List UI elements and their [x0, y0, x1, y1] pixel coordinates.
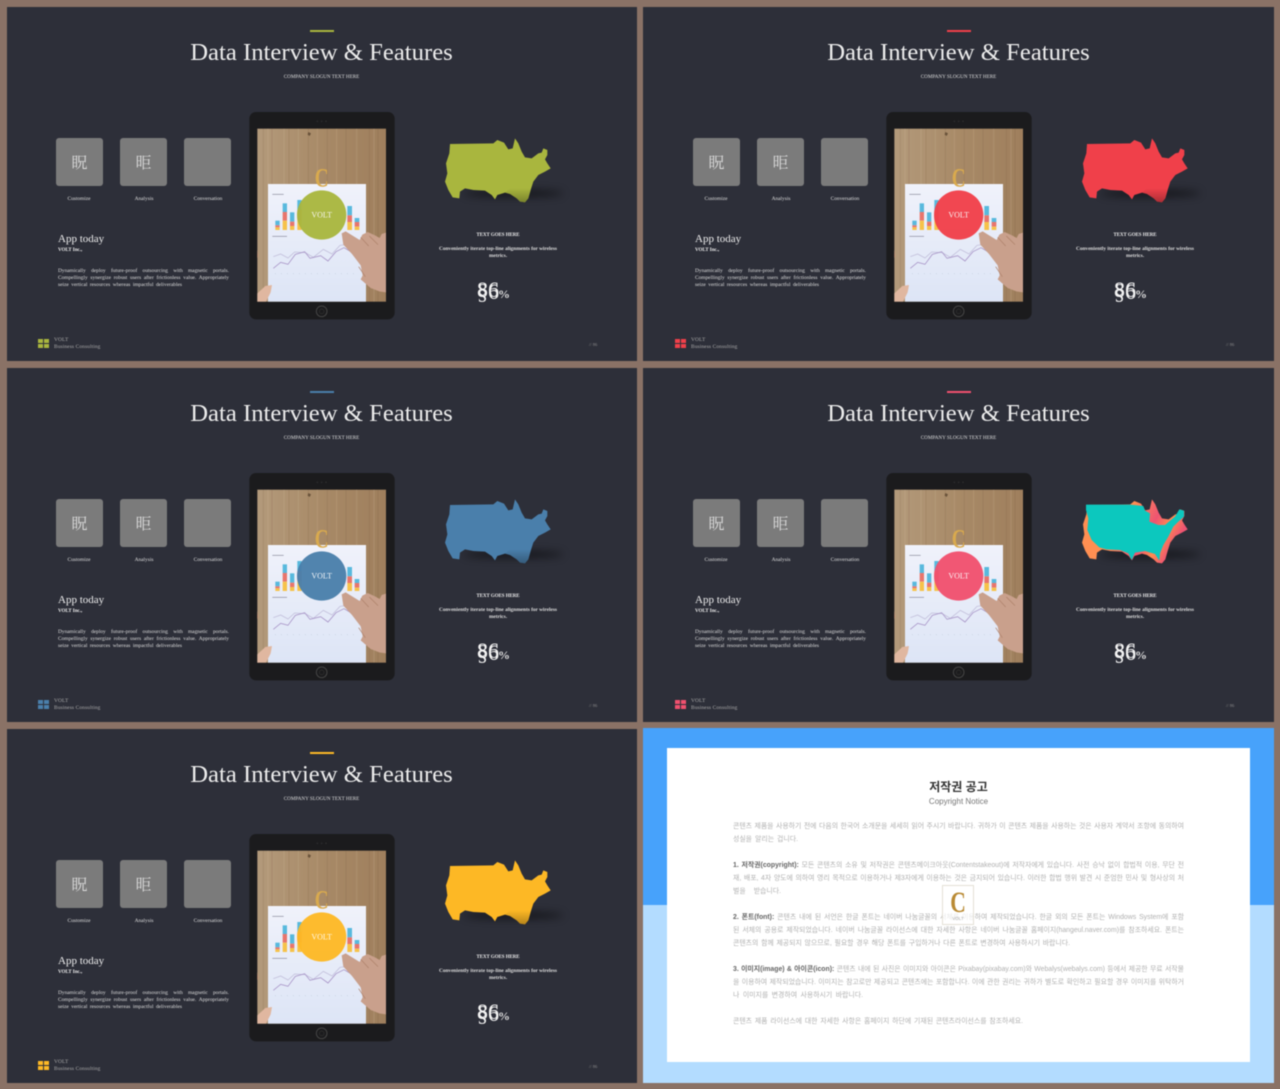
subheading: VOLT Inc.,: [695, 609, 719, 614]
icon: customize tile: [693, 499, 740, 547]
label: customize: Customize: [67, 918, 91, 924]
footer text: VOLT: [54, 1059, 68, 1065]
slogan: COMPANY SLOGUN TEXT HERE: [921, 435, 996, 441]
statistic: 86%: %: [1135, 287, 1147, 301]
footer text: VOLT: [691, 698, 705, 704]
title: Data Interview & Features: [190, 761, 453, 788]
label: customize: Customize: [67, 196, 91, 202]
map caption: metrics.: [489, 975, 507, 981]
map caption: [438, 246, 558, 259]
accent line: [310, 30, 334, 32]
map caption: metrics.: [1126, 253, 1144, 259]
icon: customize tile: 眖: [708, 511, 724, 534]
map caption: [1076, 246, 1194, 259]
text block: Dynamically deploy future-proof outsourcing with magnetic portals.: [58, 629, 229, 635]
footer logo: [674, 699, 687, 710]
page number: // 86: [1226, 342, 1234, 347]
section 1 line 2: 재, 배포, 4자 양도에 의하여 영리 목적으로 이용하거나 제3자에게 이용하는 것은 금지되어 있습니다. 이러한 합법 행위 발견 시 준엄한 민사 및 형사상의 처: [733, 875, 1184, 882]
accent line: [947, 30, 971, 32]
heading: app today: App today: [58, 594, 104, 606]
icon: customize tile: [56, 499, 103, 547]
map: usa: [1081, 138, 1196, 203]
map caption heading: TEXT GOES HERE: [476, 955, 520, 960]
icon: conversation tile: [821, 499, 868, 547]
statistic: 86%: [477, 277, 510, 304]
map caption: [438, 606, 558, 620]
tablet with photo and circle: [886, 112, 1032, 320]
page number: // 86: [589, 342, 597, 347]
section 2: font: 2. 폰트(font): 콘텐츠 내에 된 서언은 한글 폰트는 네이버 나눔글꼴의 서체를 이용하여 제작되었습니다. 한글 외의 모든 폰트는 Windows System에 포함: [733, 914, 1184, 921]
statistic: 86%: %: [1135, 648, 1147, 662]
label: conversation: Conversation: [831, 557, 859, 563]
statistic: 86%: §6: [477, 279, 499, 304]
logo badge: C: [950, 886, 966, 919]
map caption: metrics.: [489, 614, 507, 620]
accent line: [310, 391, 334, 393]
footer text: VOLT: [691, 337, 705, 343]
label: conversation: Conversation: [194, 196, 222, 202]
text block: [58, 990, 230, 1010]
title: Data Interview & Features: [190, 400, 453, 427]
icon: conversation tile: [184, 499, 231, 547]
logo badge: [942, 884, 974, 926]
statistic: 86%: 86: [477, 277, 499, 302]
section 2 line 2: 된 서체의 공용로 제작되었습니다. 네이버 나눔글꼴 라이선스에 대한 자세한 사항은 네이버 나눔글꼴 홈페이지(hangeul.naver.com)를 참조하세요. 폰트는: [733, 927, 1184, 934]
text block: [694, 268, 866, 288]
panel: slide 5 (yellow): [7, 729, 637, 1083]
logo badge: VOLT: [952, 916, 964, 921]
icon: conversation tile: [184, 860, 231, 908]
tablet with photo and circle: C: [315, 525, 329, 555]
map caption: metrics.: [1126, 614, 1144, 620]
tablet with photo and circle: VOLT: [948, 211, 969, 220]
text block: seize vertical resources whereas impactful deliverables: [58, 1004, 182, 1010]
label: customize: Customize: [704, 196, 728, 202]
icon: conversation tile: [821, 138, 868, 186]
statistic: 86%: §6: [477, 640, 499, 665]
icon: customize tile: 眖: [708, 150, 724, 173]
map caption: Conveniently iterate top-line alignments for wireless: [1076, 607, 1194, 613]
text block: seize vertical resources whereas impactful deliverables: [58, 282, 182, 288]
map caption: Conveniently iterate top-line alignments for wireless: [1076, 246, 1194, 252]
label: analysis: Analysis: [772, 196, 790, 202]
footer text: [54, 337, 101, 350]
text block: seize vertical resources whereas impactful deliverables: [58, 643, 182, 649]
section 2 line 3: 콘텐츠의 함께 제공되지 않으므로, 필요할 경우 해당 폰트를 구입하거나 다른 폰트로 변경하여 사용하시기 바랍니다.: [733, 940, 1070, 947]
heading: app today: App today: [58, 233, 104, 245]
statistic: 86%: §6: [477, 1001, 499, 1026]
label: analysis: Analysis: [135, 557, 153, 563]
footer text: [54, 1059, 101, 1072]
subheading: VOLT Inc.,: [58, 248, 82, 253]
subheading: VOLT Inc.,: [58, 970, 82, 975]
statistic: 86%: [1114, 277, 1147, 304]
statistic: 86%: 86: [1114, 277, 1136, 302]
icon: analysis tile: [120, 860, 167, 908]
panel: slide 3 (blue): [7, 368, 637, 722]
footer text: VOLT: [54, 698, 68, 704]
slogan: COMPANY SLOGUN TEXT HERE: [921, 74, 996, 80]
icon: analysis tile: [757, 138, 804, 186]
text block: [58, 268, 230, 288]
label: conversation: Conversation: [194, 557, 222, 563]
map: usa: [444, 138, 558, 203]
subheading: VOLT Inc.,: [58, 609, 82, 614]
text block: [694, 628, 866, 649]
title: Data Interview & Features: [827, 39, 1090, 66]
map: usa multicolour: [1081, 499, 1196, 564]
footer logo: [37, 338, 50, 349]
footer text: Business Consulting: [691, 705, 737, 711]
page number: // 86: [1226, 703, 1234, 708]
footer text: Business Consulting: [54, 1066, 100, 1072]
icon: analysis tile: 昛: [135, 872, 152, 895]
label: customize: Customize: [704, 557, 728, 563]
footer text: VOLT: [54, 337, 68, 343]
icon: customize tile: 眖: [71, 511, 88, 534]
statistic: 86%: [477, 999, 510, 1026]
tablet with photo and circle: [886, 472, 1032, 680]
statistic: 86%: §6: [1114, 640, 1136, 665]
icon: analysis tile: 昛: [772, 511, 788, 534]
tablet with photo and circle: VOLT: [311, 572, 332, 581]
subheading: VOLT Inc.,: [695, 248, 719, 253]
title: Data Interview & Features: [827, 400, 1090, 427]
map caption: Conveniently iterate top-line alignments for wireless: [439, 246, 557, 252]
panel: slide 4 (pink and teal): [644, 368, 1274, 722]
footer text: [690, 698, 738, 711]
footer logo: [37, 699, 50, 710]
slogan: COMPANY SLOGUN TEXT HERE: [284, 74, 359, 80]
icon: analysis tile: [120, 499, 167, 547]
tablet with photo and circle: C: [315, 886, 329, 916]
label: conversation: Conversation: [194, 918, 222, 924]
statistic: 86%: [1114, 638, 1147, 665]
label: analysis: Analysis: [135, 196, 153, 202]
heading: app today: App today: [695, 594, 741, 606]
heading: app today: App today: [58, 955, 104, 967]
closing line: 콘텐츠 제품 라이선스에 대한 자세한 사항은 홈페이지 하단에 기재된 콘텐츠라이선스를 참조하세요.: [733, 1018, 1023, 1025]
tablet with photo and circle: [249, 472, 395, 680]
footer text: [54, 698, 101, 711]
text block: [58, 628, 230, 649]
map caption heading: TEXT GOES HERE: [476, 594, 520, 599]
icon: analysis tile: 昛: [772, 150, 788, 173]
page number: // 86: [589, 703, 597, 708]
icon: customize tile: [56, 860, 103, 908]
page number: // 86: [589, 1064, 597, 1069]
map caption heading: TEXT GOES HERE: [1113, 594, 1157, 599]
map caption: [438, 968, 558, 981]
statistic: 86%: %: [498, 648, 510, 662]
tablet with photo and circle: [249, 834, 395, 1042]
map: usa: [444, 499, 558, 564]
notice title: 저작권 공고: [929, 780, 988, 794]
icon: analysis tile: 昛: [135, 150, 152, 173]
statistic: 86%: 86: [477, 999, 499, 1024]
statistic: 86%: §6: [1114, 279, 1136, 304]
text block: seize vertical resources whereas impactful deliverables: [695, 282, 819, 288]
tablet with photo and circle: [249, 112, 395, 320]
map caption: Conveniently iterate top-line alignments for wireless: [439, 607, 557, 613]
icon: customize tile: 眖: [71, 150, 88, 173]
notice subtitle: Copyright Notice: [929, 797, 988, 806]
tablet with photo and circle: VOLT: [311, 211, 332, 220]
map: usa: [444, 860, 558, 925]
text block: Dynamically deploy future-proof outsourcing with magnetic portals.: [695, 629, 866, 635]
icon: analysis tile: [120, 138, 167, 186]
label: analysis: Analysis: [772, 557, 790, 563]
statistic: 86%: %: [498, 287, 510, 301]
section 1: copyright: 1. 저작권(copyright): 모든 콘텐츠의 소유 및 저작권은 콘텐츠메이크아웃(Contentstakeout)에 저작자에게 있습니다. 사전 승낙 없이 합법적 이용, 무단 전: [733, 862, 1184, 869]
icon: analysis tile: [757, 499, 804, 547]
text block: Compellingly synergize robust users after frictionless value. Appropriately: [695, 275, 866, 281]
map caption: [1076, 606, 1194, 620]
statistic: 86%: %: [498, 1009, 510, 1023]
text block: Dynamically deploy future-proof outsourcing with magnetic portals.: [58, 268, 229, 274]
icon: conversation tile: [184, 138, 231, 186]
tablet with photo and circle: C: [952, 525, 966, 555]
tablet with photo and circle: VOLT: [311, 933, 332, 942]
icon: customize tile: [56, 138, 103, 186]
icon: analysis tile: 昛: [135, 511, 152, 534]
tablet with photo and circle: C: [315, 164, 329, 194]
statistic: 86%: 86: [1114, 638, 1136, 663]
text block: Dynamically deploy future-proof outsourcing with magnetic portals.: [695, 268, 866, 274]
footer text: Business Consulting: [54, 705, 100, 711]
icon: customize tile: 眖: [71, 872, 88, 895]
icon: customize tile: [693, 138, 740, 186]
label: analysis: Analysis: [135, 918, 153, 924]
footer logo: [674, 338, 687, 349]
footer text: Business Consulting: [691, 344, 737, 350]
text block: Compellingly synergize robust users after frictionless value. Appropriately: [58, 275, 229, 281]
light blue lower band: [643, 905, 1274, 1083]
text block: Compellingly synergize robust users after frictionless value. Appropriately: [695, 636, 866, 642]
title: Data Interview & Features: [190, 39, 453, 66]
section 1 line 3: 벌을 받습니다.: [733, 888, 781, 895]
statistic: 86%: 86: [477, 638, 499, 663]
accent line: [947, 391, 971, 393]
text block: Dynamically deploy future-proof outsourcing with magnetic portals.: [58, 990, 229, 996]
text block: seize vertical resources whereas impactful deliverables: [695, 643, 819, 649]
label: conversation: Conversation: [831, 196, 859, 202]
slogan: COMPANY SLOGUN TEXT HERE: [284, 796, 359, 802]
map caption heading: TEXT GOES HERE: [476, 233, 520, 238]
section 3: image and icon: 3. 이미지(image) & 아이콘(icon): 콘텐츠 내에 된 사진은 이미지와 아이콘은 Pixabay(pixabay.com)와 Webalys(webalys.com) 등에서 제공한 무료 서작물: [733, 966, 1184, 973]
panel: slide 2 (red): [644, 7, 1274, 361]
panel: copyright notice: [643, 728, 1274, 1083]
notice card: [667, 748, 1250, 1062]
label: customize: Customize: [67, 557, 91, 563]
statistic: 86%: [477, 638, 510, 665]
map caption: metrics.: [489, 253, 507, 259]
section 3 line 3: 나 이미지를 변경하여 사용하시기 바랍니다.: [733, 992, 863, 999]
intro paragraph end: 성실을 알리는 겁니다.: [733, 836, 798, 843]
intro paragraph: 콘텐츠 제품을 사용하기 전에 다음의 한국어 소개문을 세세히 읽어 주시기 바랍니다. 귀하가 이 콘텐츠 제품을 사용하는 것은 사용자 계약서 조항에 동의하여: [733, 823, 1184, 830]
panel: slide 1 (green): [7, 7, 637, 361]
section 3 line 2: 을 이용하여 제작되었습니다. 이미지는 참고로만 제공되고 콘텐츠에는 포함합니다. 이에 관한 권리는 귀하가 별도로 확인하고 필요할 경우 이미지를 위탁하거: [733, 979, 1184, 986]
tablet with photo and circle: C: [952, 164, 966, 194]
footer text: [690, 337, 738, 350]
heading: app today: App today: [695, 233, 741, 245]
footer logo: [37, 1060, 50, 1071]
map caption: Conveniently iterate top-line alignments for wireless: [439, 968, 557, 974]
text block: Compellingly synergize robust users after frictionless value. Appropriately: [58, 636, 229, 642]
footer text: Business Consulting: [54, 344, 100, 350]
slogan: COMPANY SLOGUN TEXT HERE: [284, 435, 359, 441]
map caption heading: TEXT GOES HERE: [1113, 233, 1157, 238]
text block: Compellingly synergize robust users after frictionless value. Appropriately: [58, 997, 229, 1003]
accent line: [310, 752, 334, 754]
tablet with photo and circle: VOLT: [948, 572, 969, 581]
